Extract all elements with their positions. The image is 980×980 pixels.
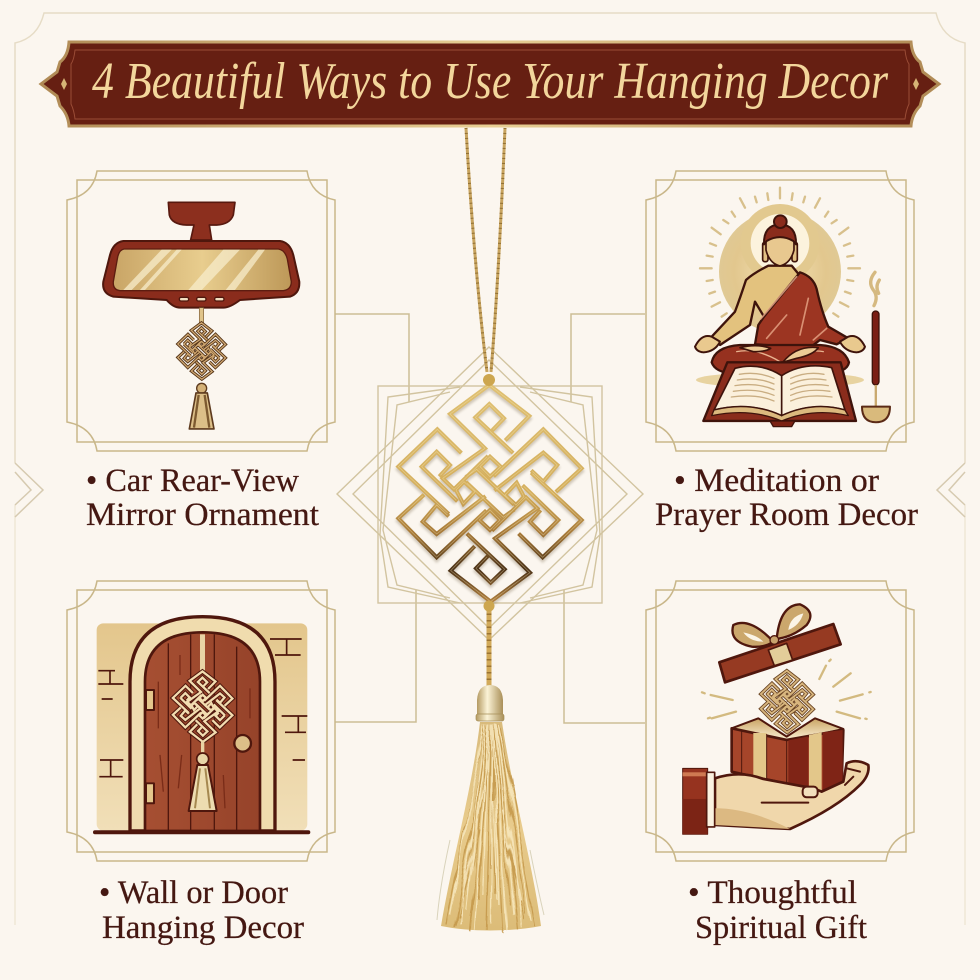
caption: • Car Rear-View: [86, 463, 300, 499]
knot metal: [398, 385, 582, 602]
icon: rear-view mirror with ornament: [103, 202, 299, 429]
panel: door: [67, 581, 335, 946]
caption: Mirror Ornament: [86, 497, 319, 533]
knot: [761, 671, 813, 733]
figure: [712, 266, 799, 345]
tassel: [201, 742, 204, 755]
caption: Spiritual Gift: [695, 910, 867, 946]
icon: gift box on open hand: [683, 604, 871, 834]
caption: • Thoughtful: [688, 875, 857, 911]
hinges: [146, 690, 154, 710]
panel: car mirror: [67, 171, 335, 533]
title banner: [41, 42, 939, 126]
caption: Hanging Decor: [102, 910, 304, 946]
hanging cord: [466, 128, 505, 690]
icon: arched door with knot: [95, 617, 308, 832]
knob: [234, 735, 251, 752]
head: [763, 242, 768, 262]
caption: • Meditation or: [674, 463, 879, 499]
caption: [688, 875, 867, 946]
caption: [99, 875, 304, 946]
tassel cap: [477, 685, 503, 718]
small knot: [178, 323, 225, 379]
lid: [719, 624, 841, 682]
hand: [715, 761, 869, 829]
chevron: right: [937, 463, 965, 517]
caption: • Wall or Door: [99, 875, 288, 911]
caption: [655, 463, 918, 533]
central geometric frame: [337, 347, 643, 640]
caption: Prayer Room Decor: [655, 497, 918, 533]
small knot: [173, 671, 232, 742]
sleeve: [683, 768, 708, 834]
small tassel: [197, 383, 207, 393]
panel: gift: [646, 581, 914, 946]
central endless knot pendant: [398, 374, 582, 612]
box: [732, 728, 843, 792]
caption: [86, 463, 319, 533]
connector lines: [335, 314, 645, 723]
sparkle rays: [702, 660, 871, 719]
chevron: left: [15, 463, 43, 517]
large tassel: [437, 685, 544, 931]
panel: meditation: [646, 171, 918, 533]
box opening: [732, 718, 843, 742]
bow: [732, 623, 773, 647]
book: [703, 362, 856, 421]
incense: [871, 272, 879, 306]
knot shadow: [398, 388, 582, 604]
icon: meditating figure with book and incense: [695, 188, 890, 427]
